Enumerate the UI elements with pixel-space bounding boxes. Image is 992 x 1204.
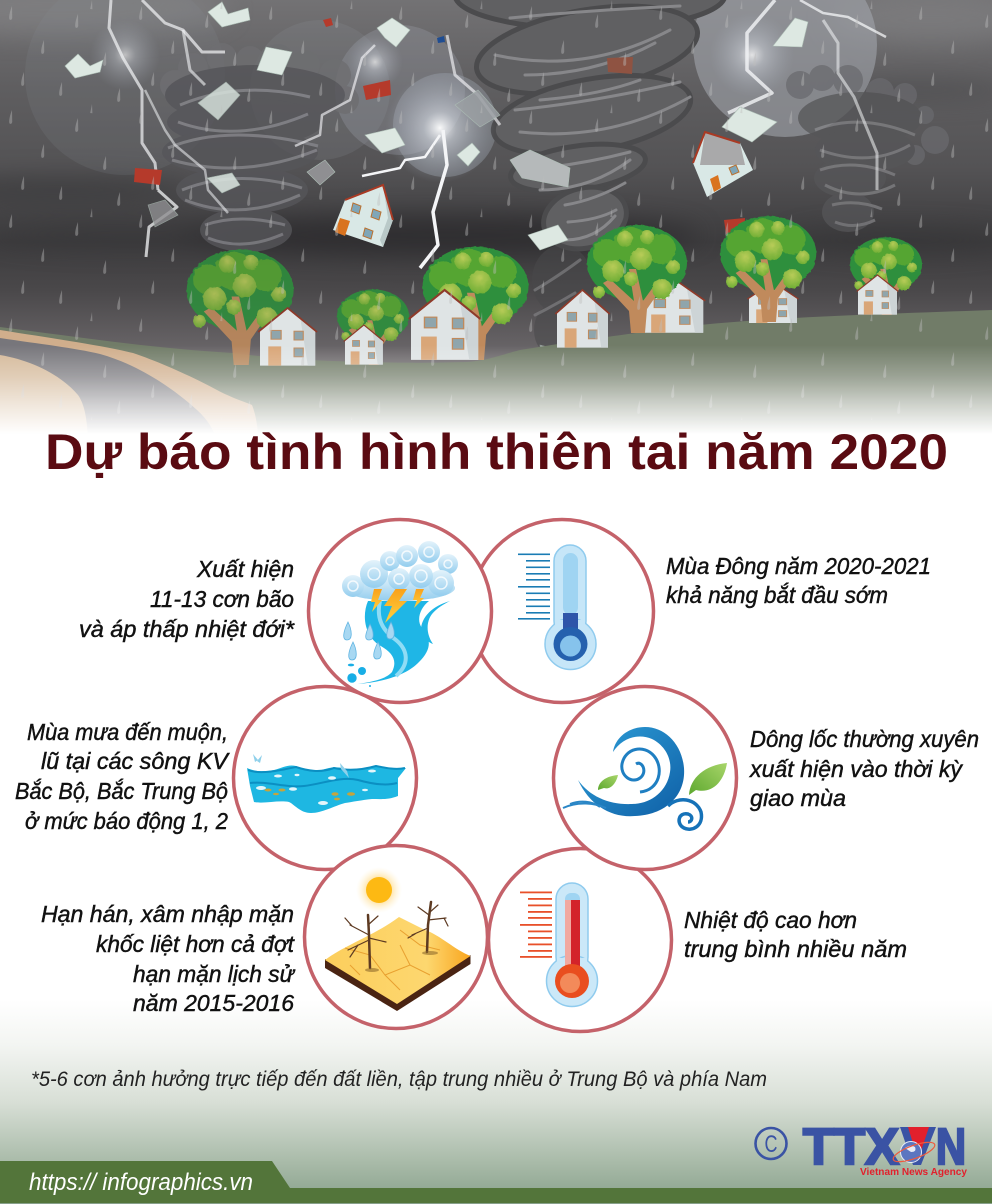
tree 5: [720, 216, 816, 322]
circle: drought: [304, 846, 488, 1028]
icon: drought: [325, 867, 470, 1011]
tree 1: [187, 249, 294, 365]
logo: copyright: [756, 1128, 786, 1159]
logo: TTXVN: TTX: [803, 1118, 899, 1175]
text: whirlwind forecast: [749, 726, 979, 811]
icon: whirlwind: [563, 727, 727, 829]
house 5: [857, 275, 898, 315]
text: drought forecast: hạn mặn lịch sử: [133, 961, 295, 987]
flying debris: paper sheets: [65, 2, 808, 372]
house 2: [344, 325, 384, 365]
back houses: [640, 278, 799, 333]
text: storm forecast: [79, 556, 295, 642]
footer bar: [0, 1161, 992, 1203]
house 1: [258, 308, 317, 366]
icon: storm: [342, 541, 458, 687]
text: flood forecast: Mùa mưa đến muộn,: [27, 719, 228, 745]
text: drought forecast: khốc liệt hơn cả đợt: [96, 931, 296, 957]
tree 2: [337, 289, 409, 365]
circle: flood: [234, 686, 416, 870]
tree 6: [850, 237, 922, 315]
logo: TTXVN: N: [936, 1118, 966, 1175]
text: winter forecast: [666, 553, 931, 608]
house 3: [409, 290, 480, 360]
lightning glows: [90, 13, 794, 183]
circle: storm: [308, 520, 492, 702]
footnote: *5-6 cơn ảnh hưởng trực tiếp đến đất liền, tập trung nhiều ở Trung Bộ và phía Nam: [31, 1068, 767, 1091]
text: flood forecast: lũ tại các sông KV: [41, 748, 231, 774]
footer url: https:// infographics.vn: [29, 1169, 253, 1196]
white fade: [0, 345, 992, 440]
house 4: [555, 290, 610, 348]
lightning bolts: [109, 0, 886, 268]
tree 4: [587, 225, 687, 333]
icon: cold thermometer: [518, 545, 596, 670]
bottom background gradient: [0, 1000, 992, 1204]
text: storm forecast: và áp thấp nhiệt đới*: [79, 616, 295, 642]
text: whirlwind forecast: xuất hiện vào thời kỳ: [749, 756, 964, 782]
circle: whirlwind: [554, 686, 736, 870]
tornado left: [160, 43, 359, 252]
icon: hot thermometer: [520, 883, 598, 1006]
circle: high temperature: [488, 848, 672, 1032]
text: temperature forecast: [684, 907, 907, 962]
tree 3: [423, 247, 529, 360]
cloud bands: [0, 0, 992, 255]
text: whirlwind forecast: giao mùa: [750, 785, 846, 811]
text: temperature forecast: Nhiệt độ cao hơn: [684, 907, 857, 933]
text: flood forecast: Bắc Bộ, Bắc Trung Bộ: [15, 778, 228, 804]
flying debris: red roof tiles: [134, 18, 745, 234]
hero illustration: storm scene: [0, 0, 992, 440]
tornado center: [455, 0, 725, 355]
text: storm forecast: 11-13 cơn bão: [150, 586, 294, 612]
text: storm forecast: Xuất hiện: [196, 556, 294, 582]
text: drought forecast: [41, 901, 296, 1016]
circle: winter thermometer: [470, 520, 654, 702]
flying house left: [333, 185, 393, 247]
text: winter forecast: khả năng bắt đầu sớm: [666, 582, 888, 608]
rain: [0, 0, 992, 420]
text: flood forecast: [15, 719, 231, 834]
tornado right: [786, 65, 949, 232]
logo: copyright: C: [764, 1131, 778, 1158]
title: Dự báo tình hình thiên tai năm 2020: [45, 424, 948, 480]
road: [0, 330, 258, 440]
text: drought forecast: năm 2015-2016: [133, 990, 294, 1016]
icon: flood water: [247, 754, 406, 813]
flying house right: [693, 132, 753, 197]
text: drought forecast: Hạn hán, xâm nhập mặn: [41, 901, 294, 927]
translucent storm clouds: [25, 0, 877, 177]
text: winter forecast: Mùa Đông năm 2020-2021: [666, 553, 931, 579]
logo: TTXVN: [803, 1118, 967, 1178]
ground hill: [0, 310, 992, 440]
text: flood forecast: ở mức báo động 1, 2: [25, 808, 228, 834]
text: whirlwind forecast: Dông lốc thường xuyên: [750, 726, 979, 752]
logo: TTXVN: Vietnam News Agency: [860, 1166, 967, 1178]
text: temperature forecast: trung bình nhiều năm: [684, 936, 907, 962]
